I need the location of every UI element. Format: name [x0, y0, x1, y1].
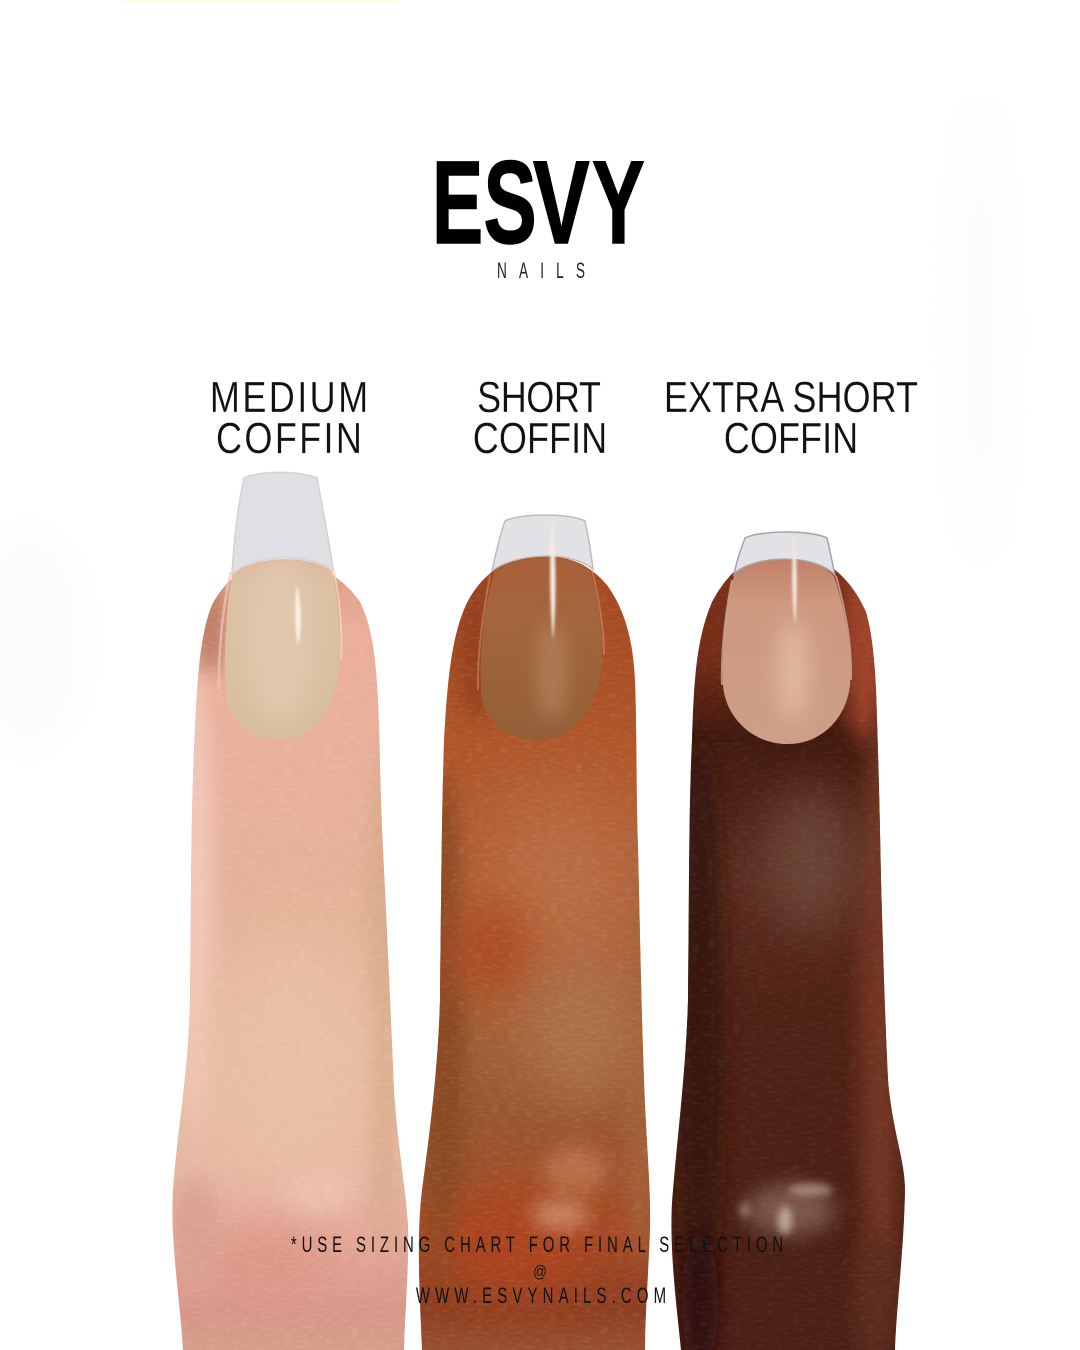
- logo: Y: [592, 137, 645, 269]
- shading: [194, 575, 226, 675]
- logo: E: [432, 137, 483, 269]
- logo: NAILS: [497, 258, 585, 283]
- nail bed: [478, 557, 604, 740]
- label: extra short coffin: [664, 373, 918, 463]
- label: medium coffin: MEDIUM: [210, 373, 368, 422]
- nail shine: [296, 585, 301, 645]
- finger: extra short coffin: [660, 532, 915, 1350]
- label: short coffin: SHORT: [477, 373, 601, 422]
- footnote: *USE SIZING CHART FOR FINAL SELECTION: [291, 1232, 783, 1257]
- shading: [847, 555, 883, 745]
- nail shine: [792, 532, 797, 625]
- nail bed: [722, 558, 851, 744]
- label: short coffin: COFFIN: [473, 414, 607, 463]
- nail shine: [550, 518, 556, 640]
- logo: [432, 136, 645, 283]
- label: medium coffin: COFFIN: [216, 414, 362, 463]
- nail tip: [734, 532, 835, 575]
- footnote: @: [533, 1263, 547, 1281]
- footnote: [291, 1232, 783, 1308]
- logo: V: [533, 136, 590, 268]
- label: extra short coffin: EXTRA SHORT: [664, 373, 918, 422]
- nail bed: [219, 559, 341, 740]
- finger: short coffin: [410, 515, 660, 1350]
- finger: medium coffin: [160, 472, 420, 1350]
- label: short coffin: [473, 373, 607, 463]
- footnote: WWW.ESVYNAILS.COM: [416, 1283, 666, 1308]
- label: extra short coffin: COFFIN: [724, 414, 858, 463]
- nail tip: [492, 515, 593, 571]
- shading: [457, 560, 493, 720]
- logo: S: [484, 138, 537, 269]
- label: medium coffin: [210, 373, 368, 463]
- nail tip: [232, 472, 333, 574]
